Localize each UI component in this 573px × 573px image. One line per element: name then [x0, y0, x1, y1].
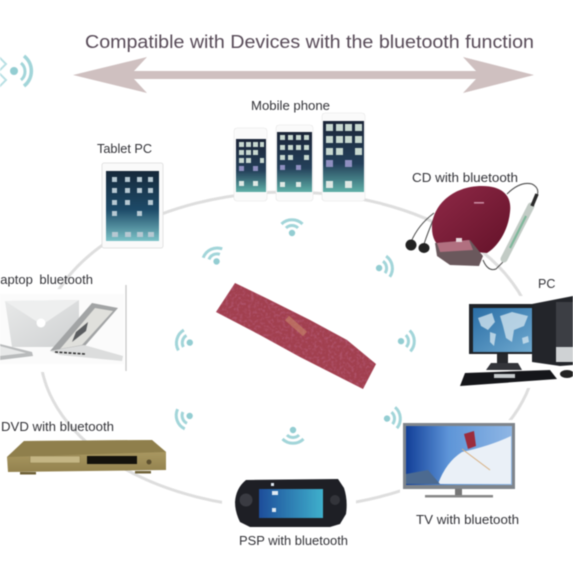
- icon: wifi signal, bottom: [282, 427, 304, 443]
- label: PSP with bluetooth: PSP with bluetooth: [239, 533, 348, 548]
- icon: wifi signal, left: [174, 329, 196, 354]
- icon: desktop PC: [458, 296, 573, 388]
- icon: PSP handheld: [222, 476, 356, 530]
- title: Compatible with Devices with the bluetooth function: [85, 31, 534, 52]
- icon: TV: [400, 420, 520, 500]
- connection ring: [40, 192, 536, 508]
- label: tablet PC: Tablet PC: [97, 141, 152, 156]
- double-headed arrow: [73, 57, 534, 93]
- icon: CD player with earphones: [406, 183, 538, 270]
- label: TV with bluetooth: TV with bluetooth: [416, 512, 519, 527]
- icon: tablet: [102, 163, 163, 248]
- icon: DVD player: [7, 440, 166, 474]
- icon: wifi signal, top: [282, 220, 302, 236]
- product: red fabric band: [216, 283, 376, 389]
- icon: wifi signal, upper left: [201, 245, 227, 269]
- label: DVD with bluetooth: DVD with bluetooth: [1, 419, 114, 434]
- icon: wifi signal, right: [397, 330, 415, 352]
- label: mobile phone: Mobile phone: [251, 98, 330, 113]
- icon: wifi signal, lower right: [383, 407, 401, 429]
- label: PC: PC: [538, 277, 555, 291]
- icon: wifi signal, upper right: [374, 255, 394, 279]
- icon: wifi signal, lower left: [174, 405, 196, 430]
- icon: bluetooth signal, top left: [0, 56, 31, 88]
- icon: laptops: [0, 285, 126, 372]
- icon: mobile phones: [234, 113, 365, 201]
- label: CD with bluetooth: CD with bluetooth: [412, 170, 518, 185]
